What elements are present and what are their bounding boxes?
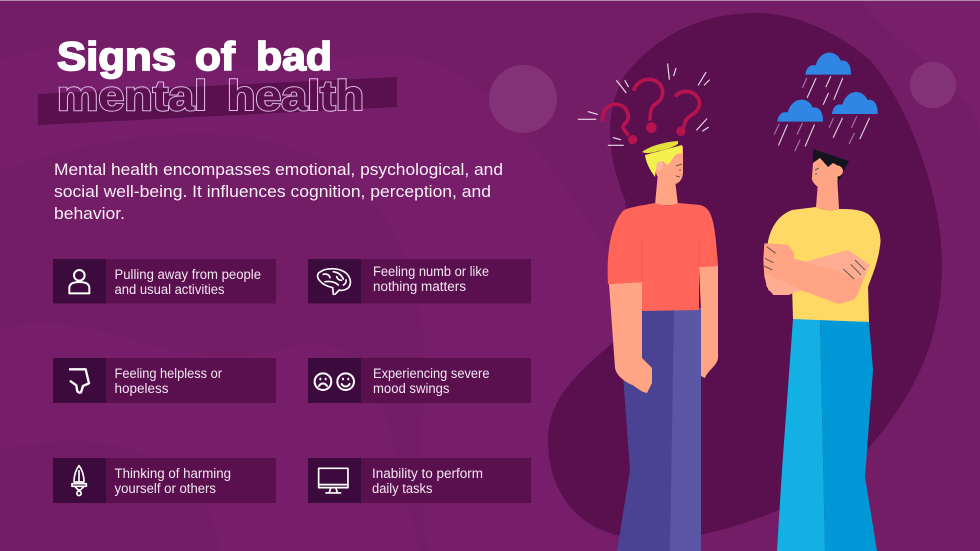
ear [831,166,843,176]
right arm [699,266,718,378]
title line 2 outline [58,78,362,112]
title [38,35,397,125]
neck [816,175,839,210]
crossed arms [763,243,870,304]
item: harming [53,458,276,503]
title line 1: bad [256,35,332,79]
intro paragraph: behavior. [54,205,125,223]
rain [774,77,869,151]
intro paragraph: Mental health encompasses emotional, psychological, and [54,161,503,179]
title line 2 outline: mental [57,72,207,119]
finger lines [764,247,865,279]
decorative circle right [910,62,956,108]
question marks with dashes [578,64,709,145]
shirt [767,207,880,322]
second line pulling away: and usual activities [114,282,225,297]
clouds [777,53,878,122]
item: daily tasks [308,458,531,503]
item: pulling away [53,259,276,304]
back forearm [805,250,870,280]
shirt [608,203,718,311]
intro paragraph: social well-being. It influences cognition, perception, and [54,183,491,201]
item: feeling numb [308,259,531,304]
item text: Inability to perform [372,466,483,481]
item text: Thinking of harming [114,466,231,481]
shirt creases [642,240,699,282]
lower arm highlight [764,273,802,295]
title line 1: Signs [57,35,176,79]
item: feeling helpless [53,358,276,403]
question dots [628,122,686,144]
dark blob behind characters [548,13,942,539]
item text: Feeling numb or like [373,264,489,279]
ear [653,160,663,170]
item text: Experiencing severe [373,366,490,381]
face [812,155,838,187]
intro paragraph [54,161,503,223]
character: right man [763,149,880,551]
item: mood swings: mood swings [373,381,450,396]
face [652,146,683,184]
icon: thumbs down [70,369,89,393]
eye and brow [676,164,682,177]
second line feeling numb: nothing matters [373,279,466,294]
item: feeling helpless: hopeless [114,381,169,396]
title line 1 [57,35,332,79]
hair top [642,141,678,153]
item: mood swings [308,358,531,403]
icon: monitor [319,468,348,493]
rain clouds [774,53,878,151]
icon: person [69,270,89,293]
title line 1: of [195,35,236,79]
title banner [38,77,397,125]
item text: Feeling helpless or [114,366,222,381]
trousers [777,319,825,551]
hair [645,145,682,177]
dashes [578,64,709,145]
neck [655,172,678,205]
character: left man [608,141,718,551]
decorative circle left [489,65,557,133]
question marks [603,79,699,135]
title line 2 outline: health [227,72,364,119]
item: harming: yourself or others [114,481,216,496]
trousers [617,308,674,551]
icon: sad and happy faces [315,373,354,390]
item text: Pulling away from people [114,267,261,282]
left arm [609,282,652,393]
hair [813,149,849,182]
icon: dagger [72,466,86,495]
eye [815,168,819,175]
front arm [763,243,863,304]
icon: brain [318,269,350,294]
item: daily tasks: daily tasks [372,481,433,496]
